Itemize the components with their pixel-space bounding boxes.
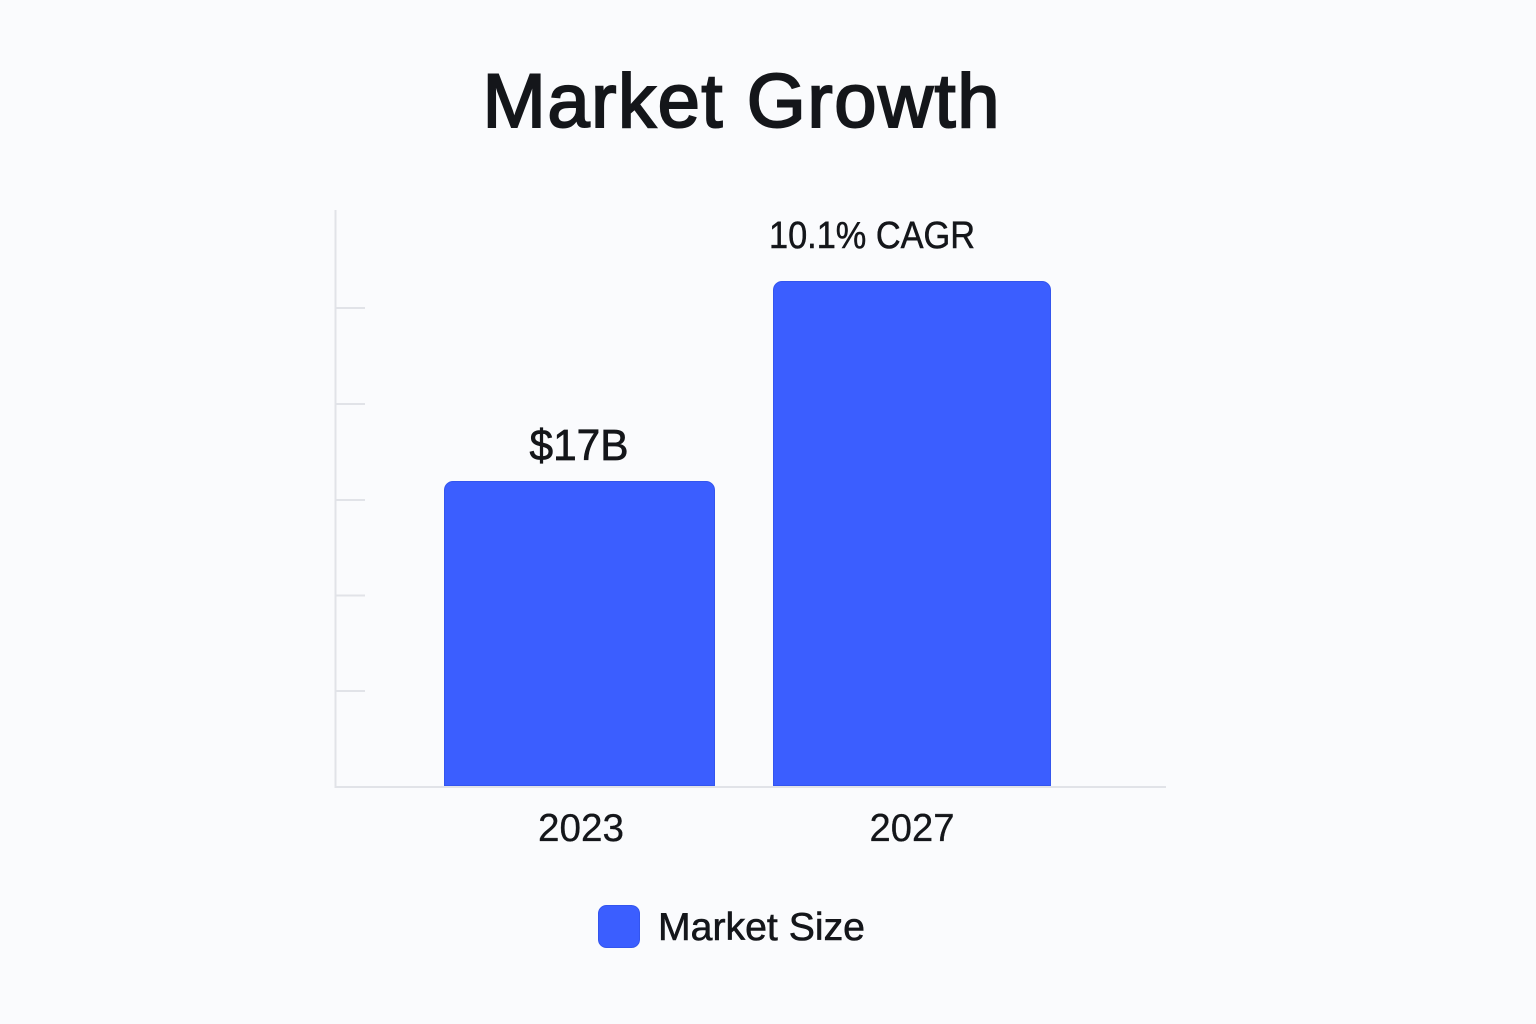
value label: 10.1% CAGR: 10.1% CAGR — [769, 215, 975, 257]
bar: 2023 — [444, 482, 714, 786]
legend label: Market Size — [658, 906, 865, 949]
legend swatch — [598, 906, 640, 948]
title: Market Growth — [482, 59, 1000, 144]
axis label: 2027: 2027 — [870, 807, 954, 850]
axis label: 2023: 2023 — [538, 807, 624, 850]
bar: 2027 — [774, 282, 1050, 786]
chart axes — [336, 210, 1166, 787]
value label: $17B: $17B — [530, 421, 628, 470]
legend — [598, 906, 865, 949]
bar chart — [336, 210, 1166, 850]
